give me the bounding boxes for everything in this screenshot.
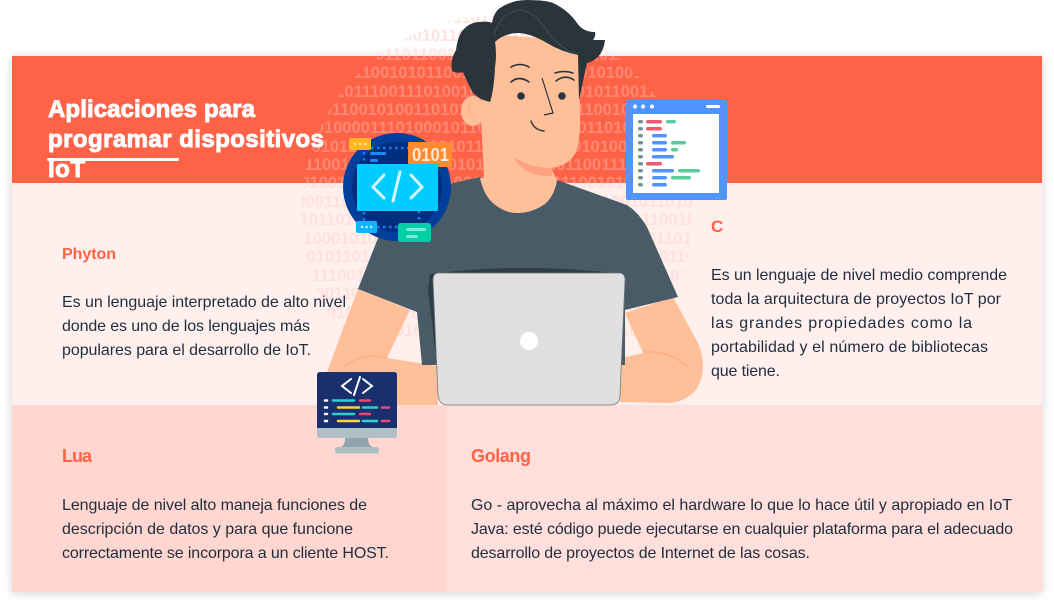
binary code background circle: 01010011010011101010010110011011100101101001011 — [282, 174, 705, 192]
text block: C: que tiene. — [711, 363, 780, 380]
panel: header band — [12, 56, 1042, 183]
text block: Phyton: Phyton — [62, 246, 116, 263]
binary code background circle: 11100100001110100010110100010001101101000101100 — [280, 119, 704, 137]
text block: Golang: Golang — [471, 446, 531, 466]
text block: Phyton — [62, 246, 346, 359]
laptop logo — [520, 332, 538, 350]
binary code background circle: 10011001011010111001011010010110010110011010110 — [296, 322, 719, 340]
neck and face — [480, 35, 580, 213]
text block: C — [711, 217, 1007, 380]
binary code background circle: 10100110111010010110100101101001110010110100101 — [288, 285, 712, 303]
text block: Phyton: donde es uno de los lenguajes más — [62, 318, 310, 335]
binary code background circle: 10110100110101101001011001011010011011001010110 — [290, 9, 714, 27]
text block: Lua: Lenguaje de nivel alto maneja funciones de — [62, 497, 367, 514]
yellow tag — [349, 138, 371, 150]
title underline — [47, 158, 179, 161]
title: programar dispositivos — [48, 126, 324, 153]
panel: middle band — [12, 183, 1042, 405]
text block: Lua: descripción de datos y para que funcione — [62, 521, 353, 538]
text block: C: las grandes propiedades como la — [711, 315, 972, 332]
icon: code window — [626, 100, 727, 200]
chin shadow — [513, 157, 552, 176]
text block: Golang: Go - aprovecha al máximo el hardware lo que lo hace útil y apropiado en IoT — [471, 497, 1012, 514]
binary code background circle: 01011001110100101101001110111010010110011010010 — [296, 27, 718, 45]
binary code background circle: 01001011010011010010110011101011010100110110001 — [284, 138, 708, 156]
binary code background circle — [301, 16, 693, 336]
panel: Golang background — [447, 405, 1042, 592]
text block: C: C — [711, 217, 723, 236]
text block: Lua — [62, 446, 389, 562]
green tag — [398, 223, 431, 242]
blue tag — [356, 221, 377, 233]
binary code background circle: 10000110010110100110100101101011100110010110100 — [278, 193, 702, 211]
arms — [322, 289, 438, 405]
binary code background circle: 10111001101100101100101100100110110011100101101 — [278, 156, 699, 174]
shirt shadow under laptop — [428, 268, 622, 365]
panel: Lua background — [12, 405, 447, 592]
binary code background circle: 01011100100110101101001110110010110100110010110 — [284, 267, 706, 285]
text block: C: Es un lenguaje de nivel medio comprende — [711, 267, 1007, 284]
eyebrows — [511, 64, 574, 82]
text block: Lua: correctamente se incorpora a un cliente HOST. — [62, 545, 389, 562]
binary code background circle: 10010001010111001001101001011010110011010011010 — [276, 230, 701, 248]
eyes — [517, 92, 525, 100]
text block: Golang: Java: esté código puede ejecutarse en cualquier plataforma para el adecuado — [471, 521, 1013, 538]
text block: Golang — [471, 446, 1013, 562]
title: IoT — [48, 156, 85, 183]
text block: C: portabilidad y el número de bibliotecas — [711, 339, 988, 356]
illustration: man with laptop — [322, 0, 703, 405]
ear — [461, 96, 485, 126]
laptop — [433, 273, 625, 405]
text block: Lua: Lua — [62, 446, 93, 466]
binary code background circle: 11010011100110110011101001101001101011100110010 — [286, 46, 706, 64]
title: Aplicaciones para — [48, 96, 256, 123]
hair — [452, 0, 605, 102]
mouth — [531, 121, 544, 131]
binary code background circle: 01101101011001011100100110100001011010011100101 — [282, 211, 705, 229]
icon: code globe — [343, 133, 452, 242]
icon: code globe: 0101 — [412, 145, 449, 165]
text block: C: toda la arquitectura de proyectos IoT por — [711, 291, 1002, 308]
text block: Phyton: populares para el desarrollo de IoT. — [62, 342, 311, 359]
text block: Golang: desarrollo de proyectos de Internet de las cosas. — [471, 545, 810, 562]
icon: code monitor — [317, 372, 397, 454]
binary code background circle: 11001011010010110011001010110101100101100101101 — [280, 248, 704, 266]
binary code background circle: 01010110010100110101001100100110110010110100111 — [286, 101, 710, 119]
shirt — [358, 177, 678, 365]
binary code background circle: 01110101100101100100110100101101001101001011001 — [292, 304, 716, 322]
binary code background circle: 10111010111001110100101110111001001011001110100 — [282, 83, 701, 101]
hair strand highlight — [494, 10, 578, 54]
title — [47, 96, 324, 183]
orange binary tag — [408, 142, 452, 167]
nose — [542, 78, 553, 115]
text block: Phyton: Es un lenguaje interpretado de alto nivel — [62, 294, 346, 311]
binary code background circle: 01101001100101011001011001100110010100101100110 — [290, 64, 714, 82]
code screen — [357, 164, 438, 211]
